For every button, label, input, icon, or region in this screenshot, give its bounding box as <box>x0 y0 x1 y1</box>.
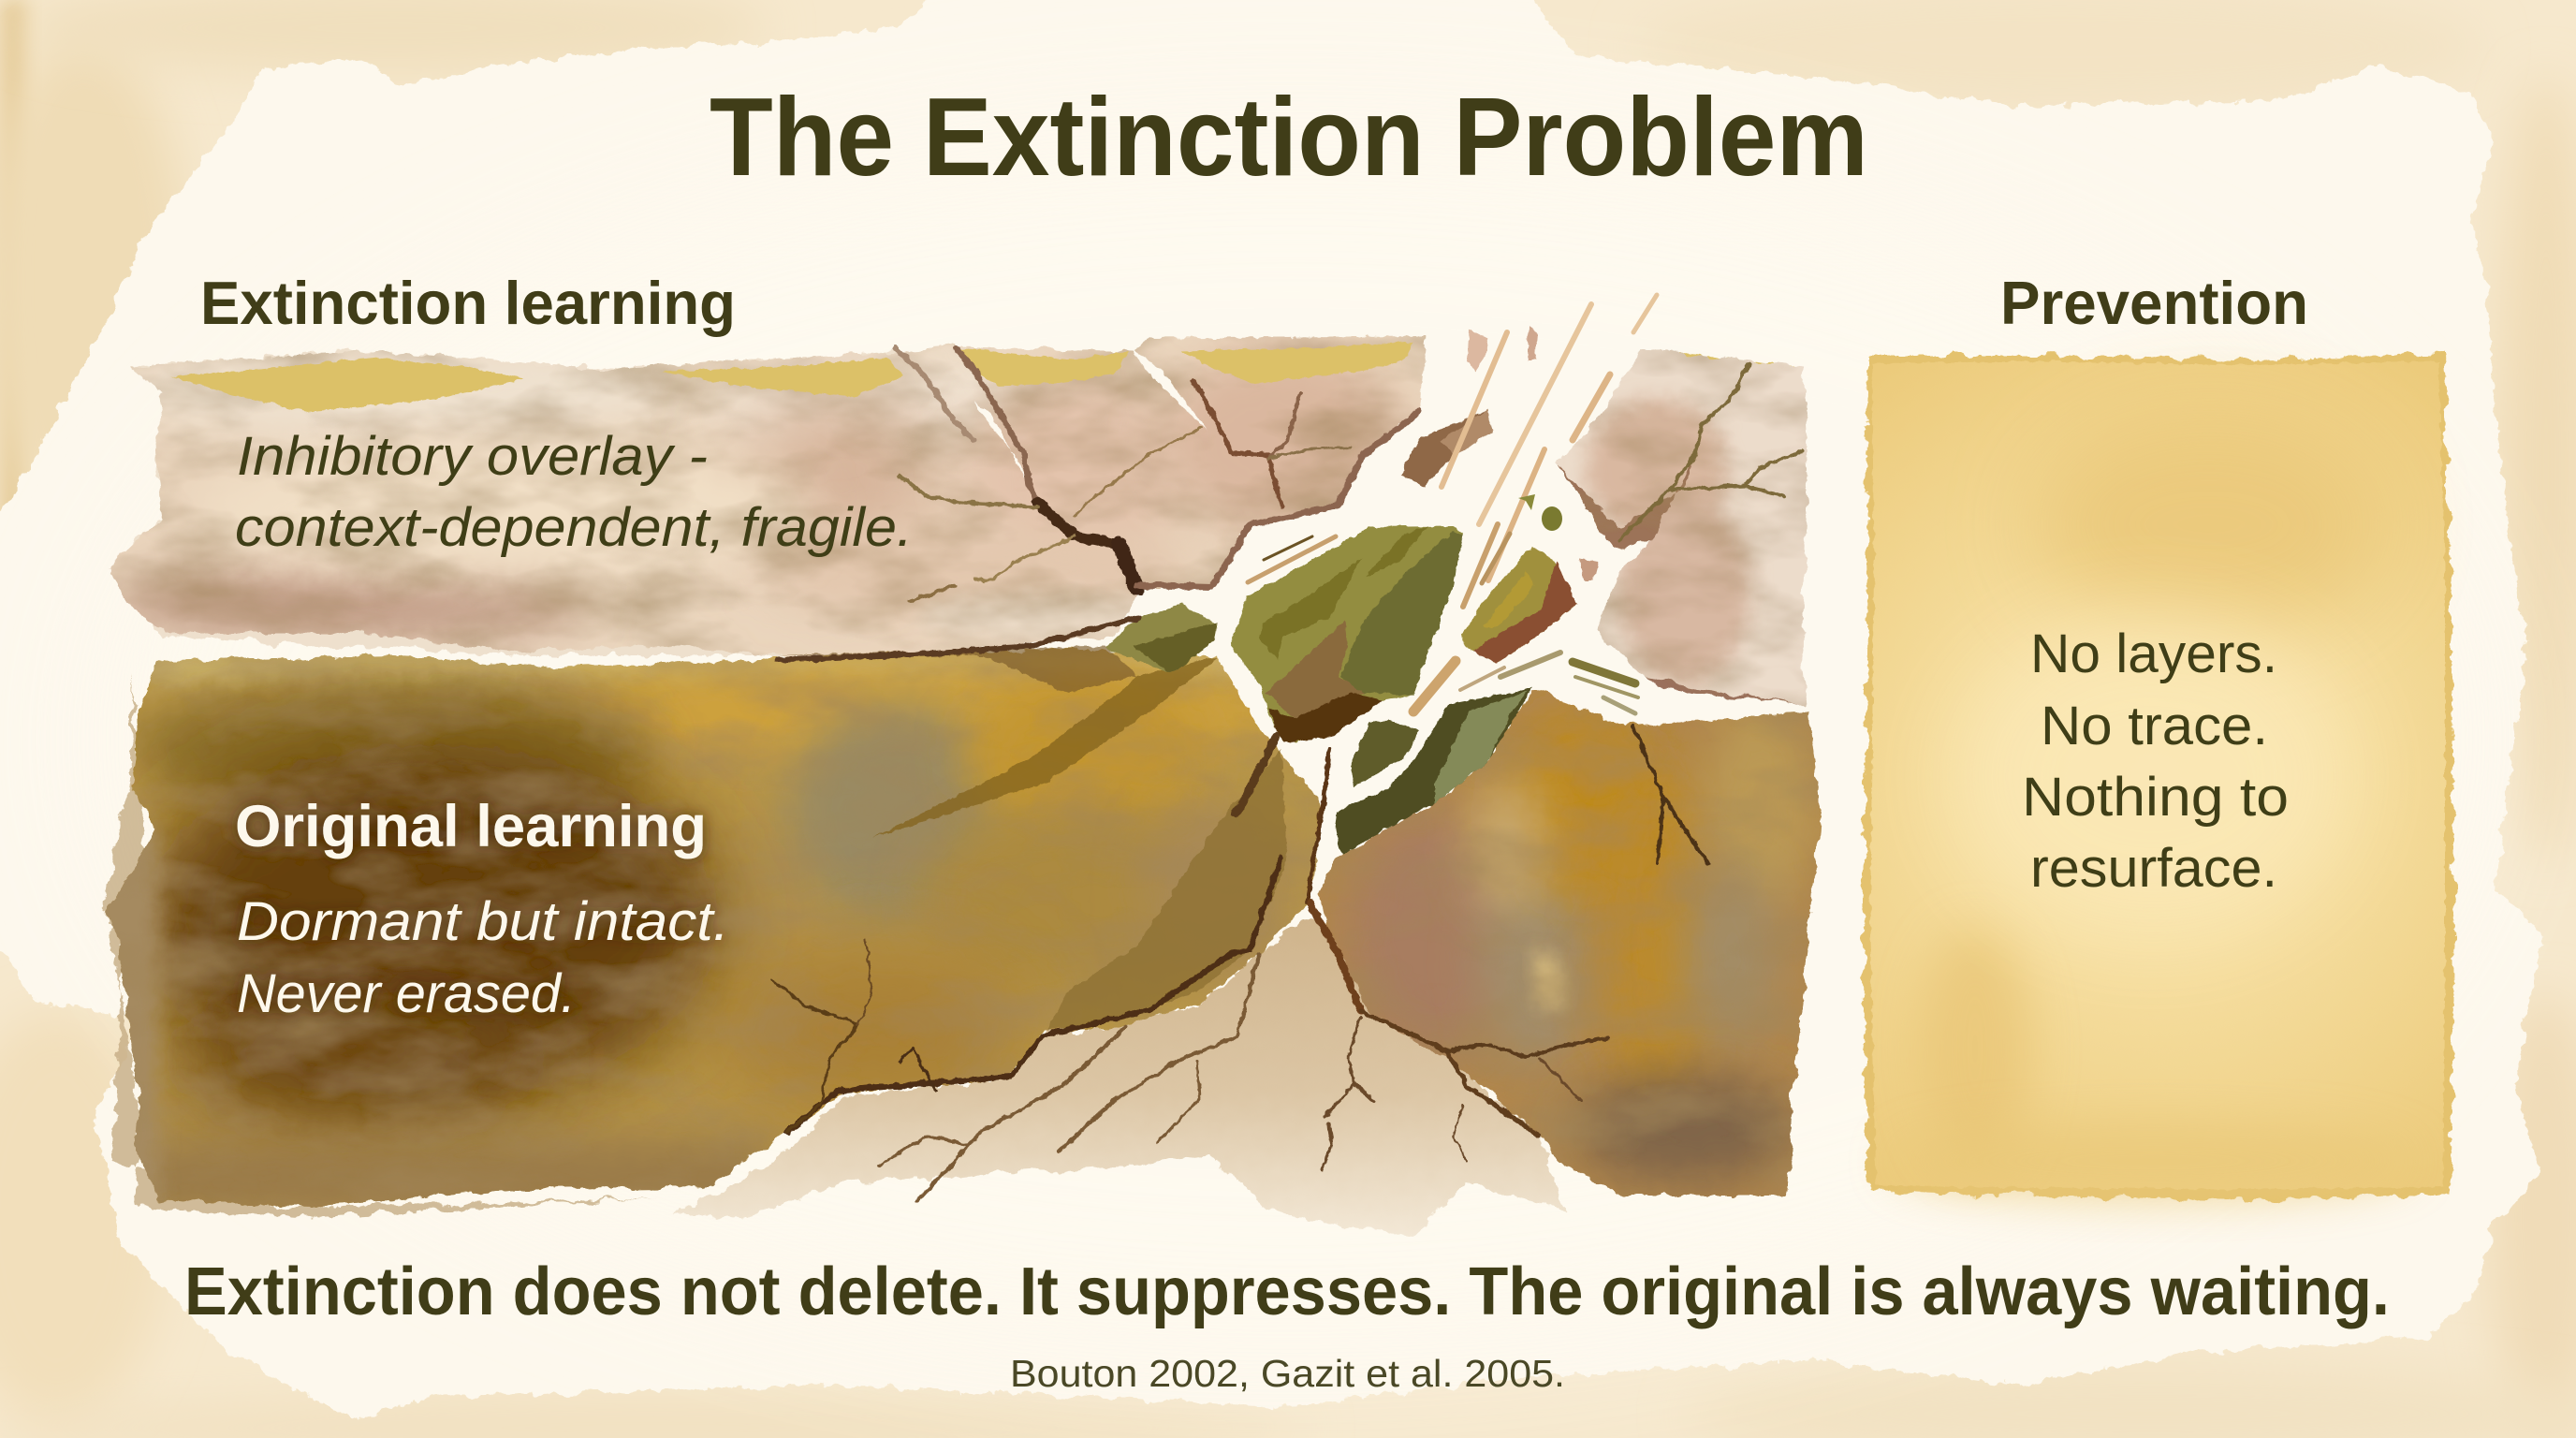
rock: olive wedge <box>1334 688 1532 855</box>
rock: small olive left <box>1105 604 1217 672</box>
fracture wedge <box>873 657 1219 838</box>
text: inhibitory overlay: Inhibitory overlay - <box>237 426 708 487</box>
lower wedge <box>1046 749 1287 1030</box>
text: prevention statement: No layers. <box>2030 624 2277 684</box>
paper cream glow <box>122 140 2462 1339</box>
text: original learning: Dormant but intact. <box>237 891 729 952</box>
rock specks <box>1518 494 1562 531</box>
heading: prevention: Prevention <box>2000 269 2308 337</box>
panel: original learning base right <box>1310 674 1835 1217</box>
text: prevention statement: Nothing to <box>2022 767 2289 828</box>
panel: prevention <box>1863 354 2454 1200</box>
text: original learning: Original learning <box>235 794 707 859</box>
text: prevention statement <box>2022 624 2289 899</box>
title: The Extinction Problem <box>710 75 1868 199</box>
text: prevention statement: No trace. <box>2041 696 2268 756</box>
rock: small dark olive <box>1351 721 1420 786</box>
text: inhibitory overlay: context-dependent, fragile. <box>235 497 913 558</box>
rock: mid ochre-red shard <box>1462 546 1577 663</box>
gold leaf stripes <box>172 342 1802 412</box>
text: inhibitory overlay <box>235 426 913 558</box>
cracks: light fracture gaps <box>973 348 1350 913</box>
pale ground beneath the fracture <box>673 917 1581 1236</box>
rock: big olive boulder <box>1231 526 1463 742</box>
panel: original learning base left <box>103 674 777 1217</box>
takeaway line: Extinction does not delete. It suppresses. The original is always waiting. <box>184 1255 2390 1329</box>
text: prevention statement: resurface. <box>2030 838 2277 899</box>
illustration: cracked learning layers <box>94 295 1835 1236</box>
citation: Bouton 2002, Gazit et al. 2005. <box>1010 1352 1565 1395</box>
fragment: right overlay shards <box>1555 349 1809 708</box>
panel: inhibitory overlay layer <box>109 333 1427 657</box>
overlay halo <box>110 351 1133 655</box>
text: original learning: Never erased. <box>237 963 576 1024</box>
text: original learning <box>235 794 729 1024</box>
cracks: dark fissure network <box>772 348 1802 1200</box>
small pink shard specks <box>1400 328 1598 580</box>
heading: extinction learning: Extinction learning <box>200 269 736 337</box>
flying streaks <box>1248 295 1657 713</box>
ochre seam <box>777 646 1137 693</box>
